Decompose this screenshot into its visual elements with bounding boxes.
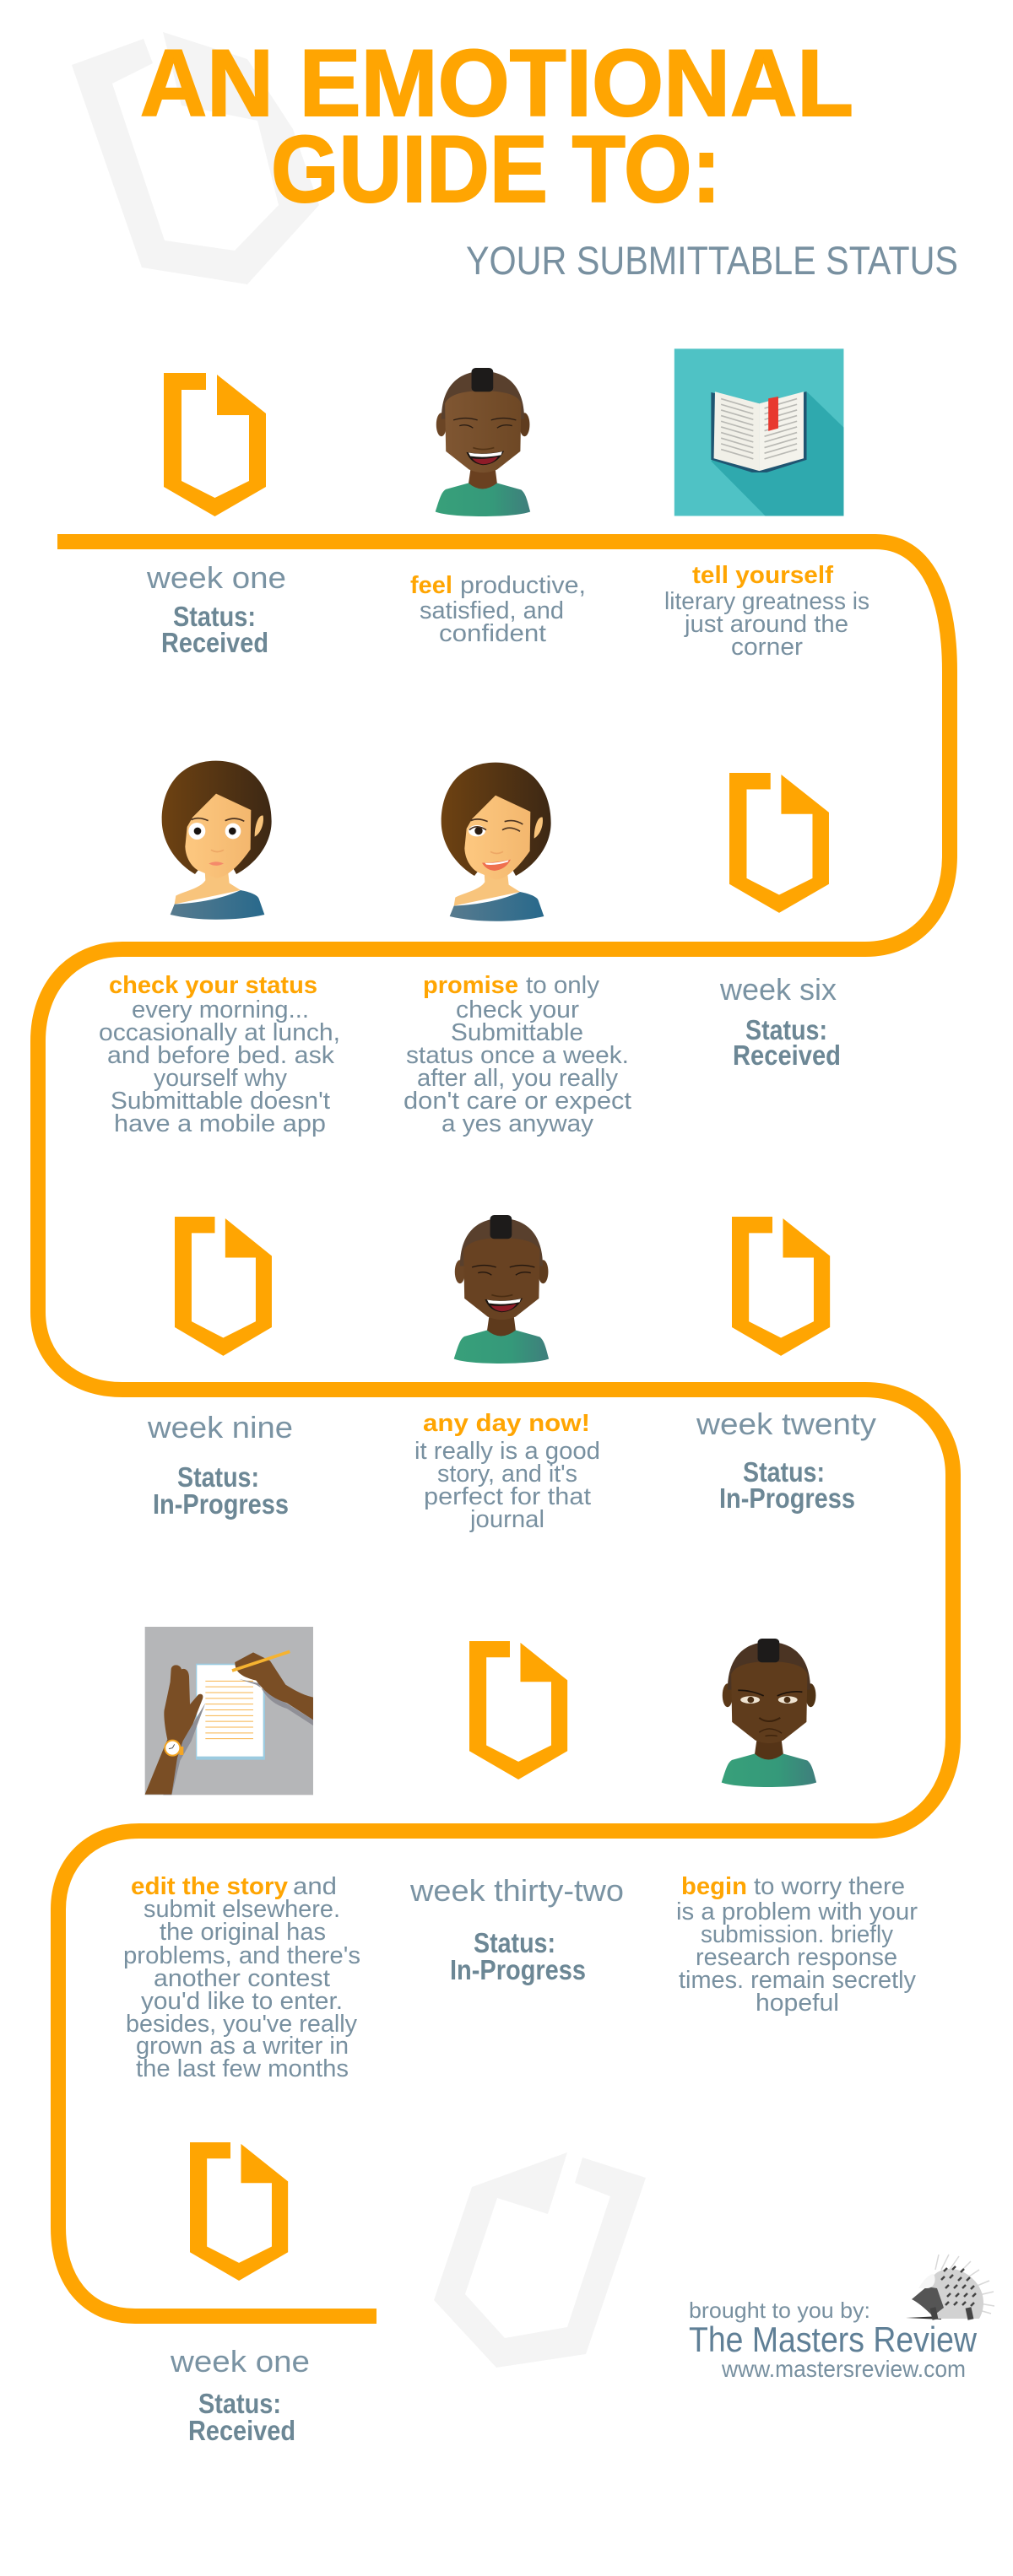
watermark: tilted logo behind title <box>72 32 319 284</box>
icon: worried woman <box>162 761 272 920</box>
text: promise: status once a week. <box>406 1042 629 1069</box>
text: feel productive: feel <box>410 572 452 599</box>
text: week thirty-two status: In-Progress <box>450 1954 586 1985</box>
text: edit the story: edit the story <box>131 1873 288 1900</box>
watermark: tilted logo at bottom <box>434 2152 646 2368</box>
text: promise: don't care or expect <box>404 1088 631 1115</box>
text: begin to worry: hopeful <box>756 1990 839 2017</box>
text: check your status: occasionally at lunch, <box>99 1019 340 1046</box>
text: tell yourself: just around the <box>684 611 848 638</box>
text: any day now: any day now! <box>423 1410 590 1437</box>
credit: brought to you by: www.mastersreview.com <box>721 2356 966 2382</box>
text: begin to worry <box>676 1873 918 2017</box>
icon: open book on teal <box>674 348 843 516</box>
text: any day now: it really is a good <box>414 1438 600 1465</box>
text: final week one status: week one <box>170 2344 310 2379</box>
text: tell yourself: tell yourself <box>692 562 833 589</box>
text: week one status: week one <box>146 560 286 595</box>
text: begin to worry: to worry there <box>754 1873 905 1900</box>
text: feel productive: productive, <box>460 572 586 599</box>
icon: laughing man two <box>454 1215 549 1364</box>
text: check your status: check your status <box>109 972 317 999</box>
text: any day now: journal <box>469 1506 544 1533</box>
icon: logo week twenty <box>732 1217 830 1356</box>
text: edit the story <box>123 1873 360 2082</box>
icon: logo week one <box>164 373 266 516</box>
text: promise: check your <box>456 996 579 1023</box>
text: week twenty status: week twenty <box>696 1407 876 1441</box>
icon: logo week six <box>729 773 829 913</box>
icon: porcupine <box>906 2255 994 2319</box>
icon: laughing man <box>436 368 530 516</box>
text: promise: Submittable <box>451 1019 583 1046</box>
text: edit the story: grown as a writer in <box>136 2033 349 2060</box>
title: GUIDE TO: <box>271 116 721 222</box>
text: edit the story: submit elsewhere. <box>144 1896 340 1923</box>
credit: brought to you by: The Masters Review <box>689 2319 978 2359</box>
text: check your status <box>99 972 340 1137</box>
text: edit the story: you'd like to enter. <box>141 1988 343 2015</box>
credit: brought to you by <box>689 2298 978 2382</box>
text: promise <box>404 972 631 1137</box>
text: edit the story: besides, you've really <box>126 2011 357 2038</box>
text: week twenty status: Status: <box>743 1456 825 1488</box>
text: tell yourself <box>664 562 869 661</box>
text: week twenty status <box>696 1407 876 1514</box>
text: feel productive: confident <box>439 620 546 647</box>
icon: logo final week one <box>190 2142 288 2281</box>
text: week six status <box>719 972 841 1071</box>
text: promise: a yes anyway <box>441 1110 594 1137</box>
text: promise: after all, you really <box>417 1065 619 1092</box>
text: promise: promise <box>423 972 518 999</box>
icon: winking woman <box>441 763 551 921</box>
text: any day now <box>414 1410 600 1533</box>
text: edit the story: problems, and there's <box>123 1942 360 1969</box>
text: week six status: week six <box>719 972 837 1007</box>
text: check your status: yourself why <box>154 1065 287 1092</box>
text: begin to worry: times. remain secretly <box>679 1967 916 1994</box>
text: any day now: story, and it's <box>437 1461 577 1488</box>
text: promise: to only <box>526 972 599 999</box>
text: week twenty status: In-Progress <box>719 1482 855 1514</box>
icon: frowning man <box>722 1639 816 1787</box>
text: tell yourself: literary greatness is <box>664 588 869 615</box>
text: week six status: Received <box>733 1040 841 1071</box>
text: week six status: Status: <box>745 1014 827 1045</box>
text: week one status: Received <box>161 627 268 658</box>
text: begin to worry: submission. briefly <box>701 1921 893 1948</box>
text: check your status: and before bed. ask <box>107 1042 335 1069</box>
text: week one status: Status: <box>173 601 256 632</box>
text: week nine status: Status: <box>177 1461 259 1493</box>
text: feel productive: satisfied, and <box>420 597 564 624</box>
text: edit the story: the last few months <box>136 2055 349 2082</box>
text: week thirty-two status: Status: <box>474 1927 555 1958</box>
text: week one status <box>146 560 286 658</box>
text: final week one status <box>170 2344 310 2446</box>
text: begin to worry: begin <box>681 1873 747 1900</box>
text: begin to worry: is a problem with your <box>676 1898 918 1925</box>
text: week nine status: week nine <box>147 1410 293 1445</box>
text: week thirty-two status <box>409 1873 624 1985</box>
text: final week one status: Status: <box>198 2388 281 2419</box>
winding orange timeline path <box>38 542 953 2316</box>
text: edit the story: another contest <box>154 1965 330 1992</box>
text: week thirty-two status: week thirty-two <box>409 1873 624 1908</box>
text: edit the story: the original has <box>160 1919 326 1946</box>
text: begin to worry: research response <box>696 1944 897 1971</box>
text: feel productive <box>410 572 586 647</box>
text: week nine status <box>147 1410 293 1520</box>
text: check your status: Submittable doesn't <box>111 1088 330 1115</box>
text: edit the story: and <box>293 1873 337 1900</box>
icon: hands editing a page <box>145 1627 313 1795</box>
text: any day now: perfect for that <box>424 1483 591 1510</box>
title <box>140 30 853 222</box>
text: check your status: every morning... <box>132 996 309 1023</box>
text: check your status: have a mobile app <box>114 1110 326 1137</box>
text: tell yourself: corner <box>731 634 803 661</box>
subtitle: YOUR SUBMITTABLE STATUS <box>466 238 958 283</box>
icon: logo week nine <box>175 1217 272 1356</box>
text: week nine status: In-Progress <box>153 1488 289 1520</box>
text: final week one status: Received <box>188 2415 295 2446</box>
icon: logo week thirty-two <box>469 1641 567 1779</box>
credit: brought to you by: brought to you by: <box>689 2298 870 2323</box>
title: AN EMOTIONAL <box>140 30 853 136</box>
